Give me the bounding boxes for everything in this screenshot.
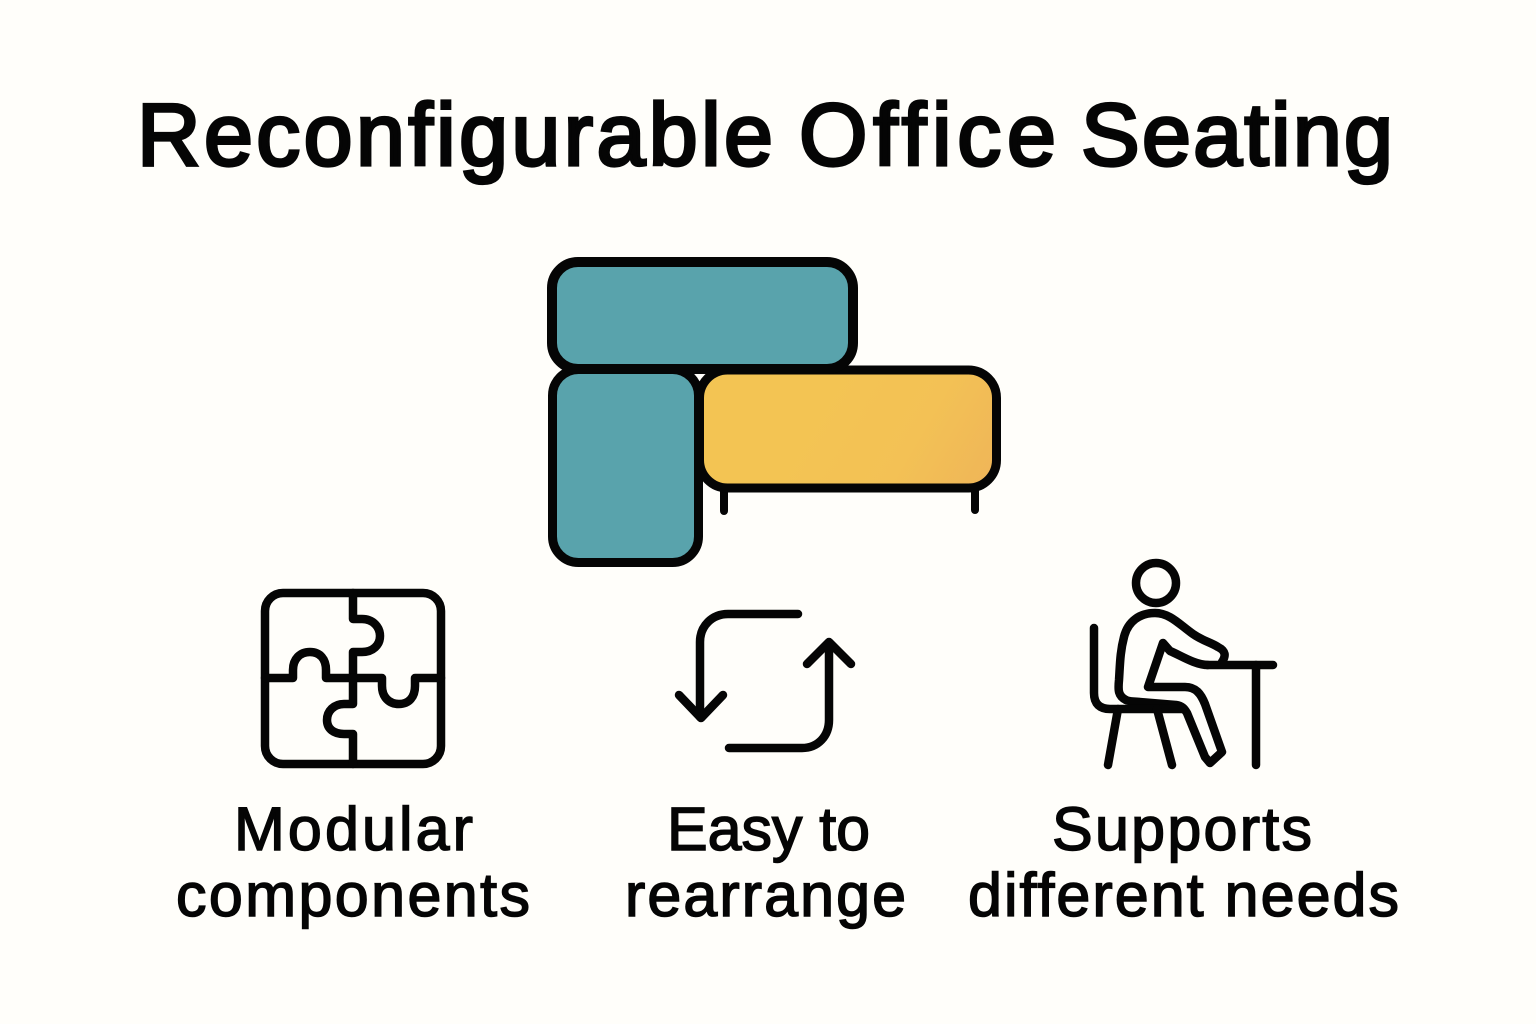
label: supports different needs: different needs — [968, 861, 1399, 929]
label: modular components — [176, 795, 530, 929]
sofa leg left — [720, 488, 728, 511]
yellow seat module — [700, 370, 996, 488]
title: Seating — [1081, 85, 1393, 184]
icon: puzzle — [265, 593, 441, 764]
label: modular components: components — [176, 861, 530, 929]
icon: rearrange arrows — [679, 614, 851, 748]
label: easy to rearrange: rearrange — [625, 861, 906, 929]
illustration: modular sofa — [552, 262, 996, 562]
label: modular components: Modular — [234, 795, 473, 863]
teal side module — [552, 370, 698, 562]
title: Office — [799, 85, 1056, 184]
label: easy to rearrange — [625, 795, 906, 929]
title: Reconfigurable — [137, 85, 773, 184]
label: easy to rearrange: Easy to — [667, 795, 870, 863]
label: supports different needs — [968, 795, 1399, 929]
icon: seated person at desk — [1094, 563, 1273, 765]
title — [137, 85, 1393, 184]
sofa leg right — [971, 488, 979, 510]
teal top module — [552, 262, 853, 369]
label: supports different needs: Supports — [1052, 795, 1312, 863]
